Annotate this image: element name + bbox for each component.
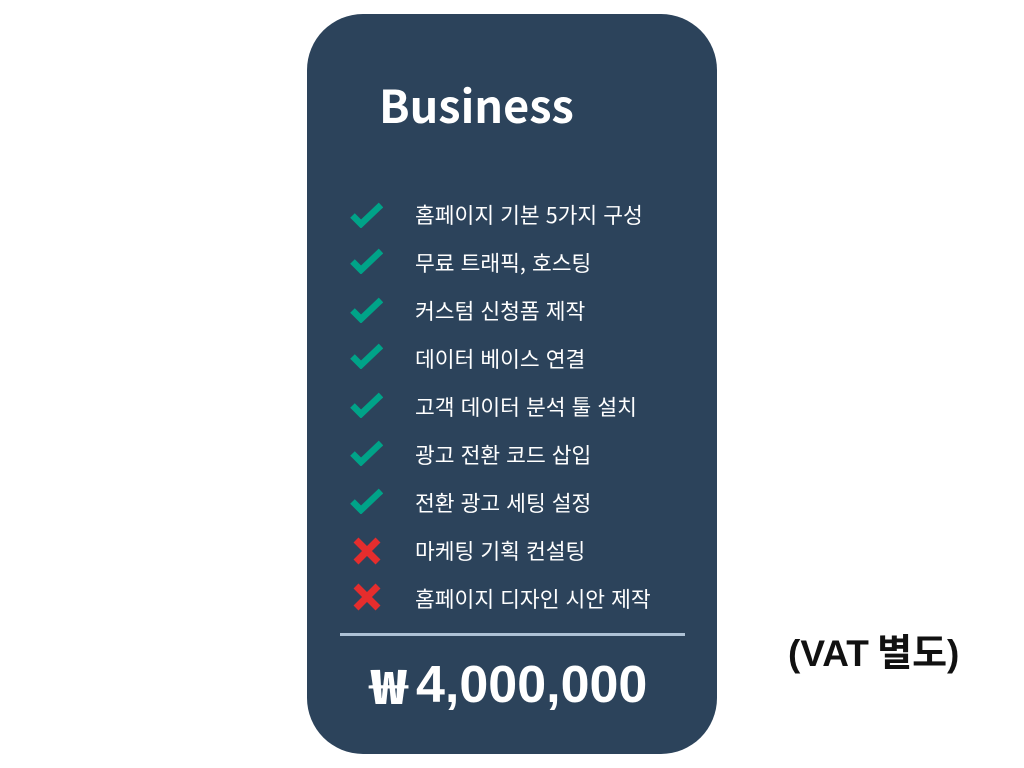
price <box>368 649 647 718</box>
icon: check 3 <box>350 298 383 323</box>
panel: Business plan card <box>307 14 717 754</box>
icon: cross 2 <box>354 584 380 610</box>
feature text 7: 전환 광고 세팅 설정 <box>415 487 591 518</box>
icon: check 5 <box>350 392 383 418</box>
price: 4,000,000 <box>416 656 647 714</box>
icon: check 2 <box>350 248 383 274</box>
icon: check 7 <box>350 488 383 514</box>
heading: Business: Business <box>379 71 574 136</box>
icon: check 1 <box>350 202 383 228</box>
divider line <box>340 633 685 636</box>
feature text 2: 무료 트래픽, 호스팅 <box>415 247 591 278</box>
price: ₩ <box>370 649 407 718</box>
note: VAT excluded: (VAT 별도) <box>788 633 959 675</box>
icon: cross 1 <box>354 538 380 564</box>
icon: check 4 <box>350 344 383 369</box>
feature text 8: 마케팅 기획 컨설팅 <box>415 535 585 566</box>
icon: check 6 <box>350 440 383 466</box>
feature text 5: 고객 데이터 분석 툴 설치 <box>415 391 637 422</box>
feature text 9: 홈페이지 디자인 시안 제작 <box>415 583 651 614</box>
feature text 6: 광고 전환 코드 삽입 <box>415 439 591 470</box>
feature text 4: 데이터 베이스 연결 <box>415 343 585 374</box>
feature text 3: 커스텀 신청폼 제작 <box>415 295 585 326</box>
feature text 1: 홈페이지 기본 5가지 구성 <box>415 199 643 230</box>
